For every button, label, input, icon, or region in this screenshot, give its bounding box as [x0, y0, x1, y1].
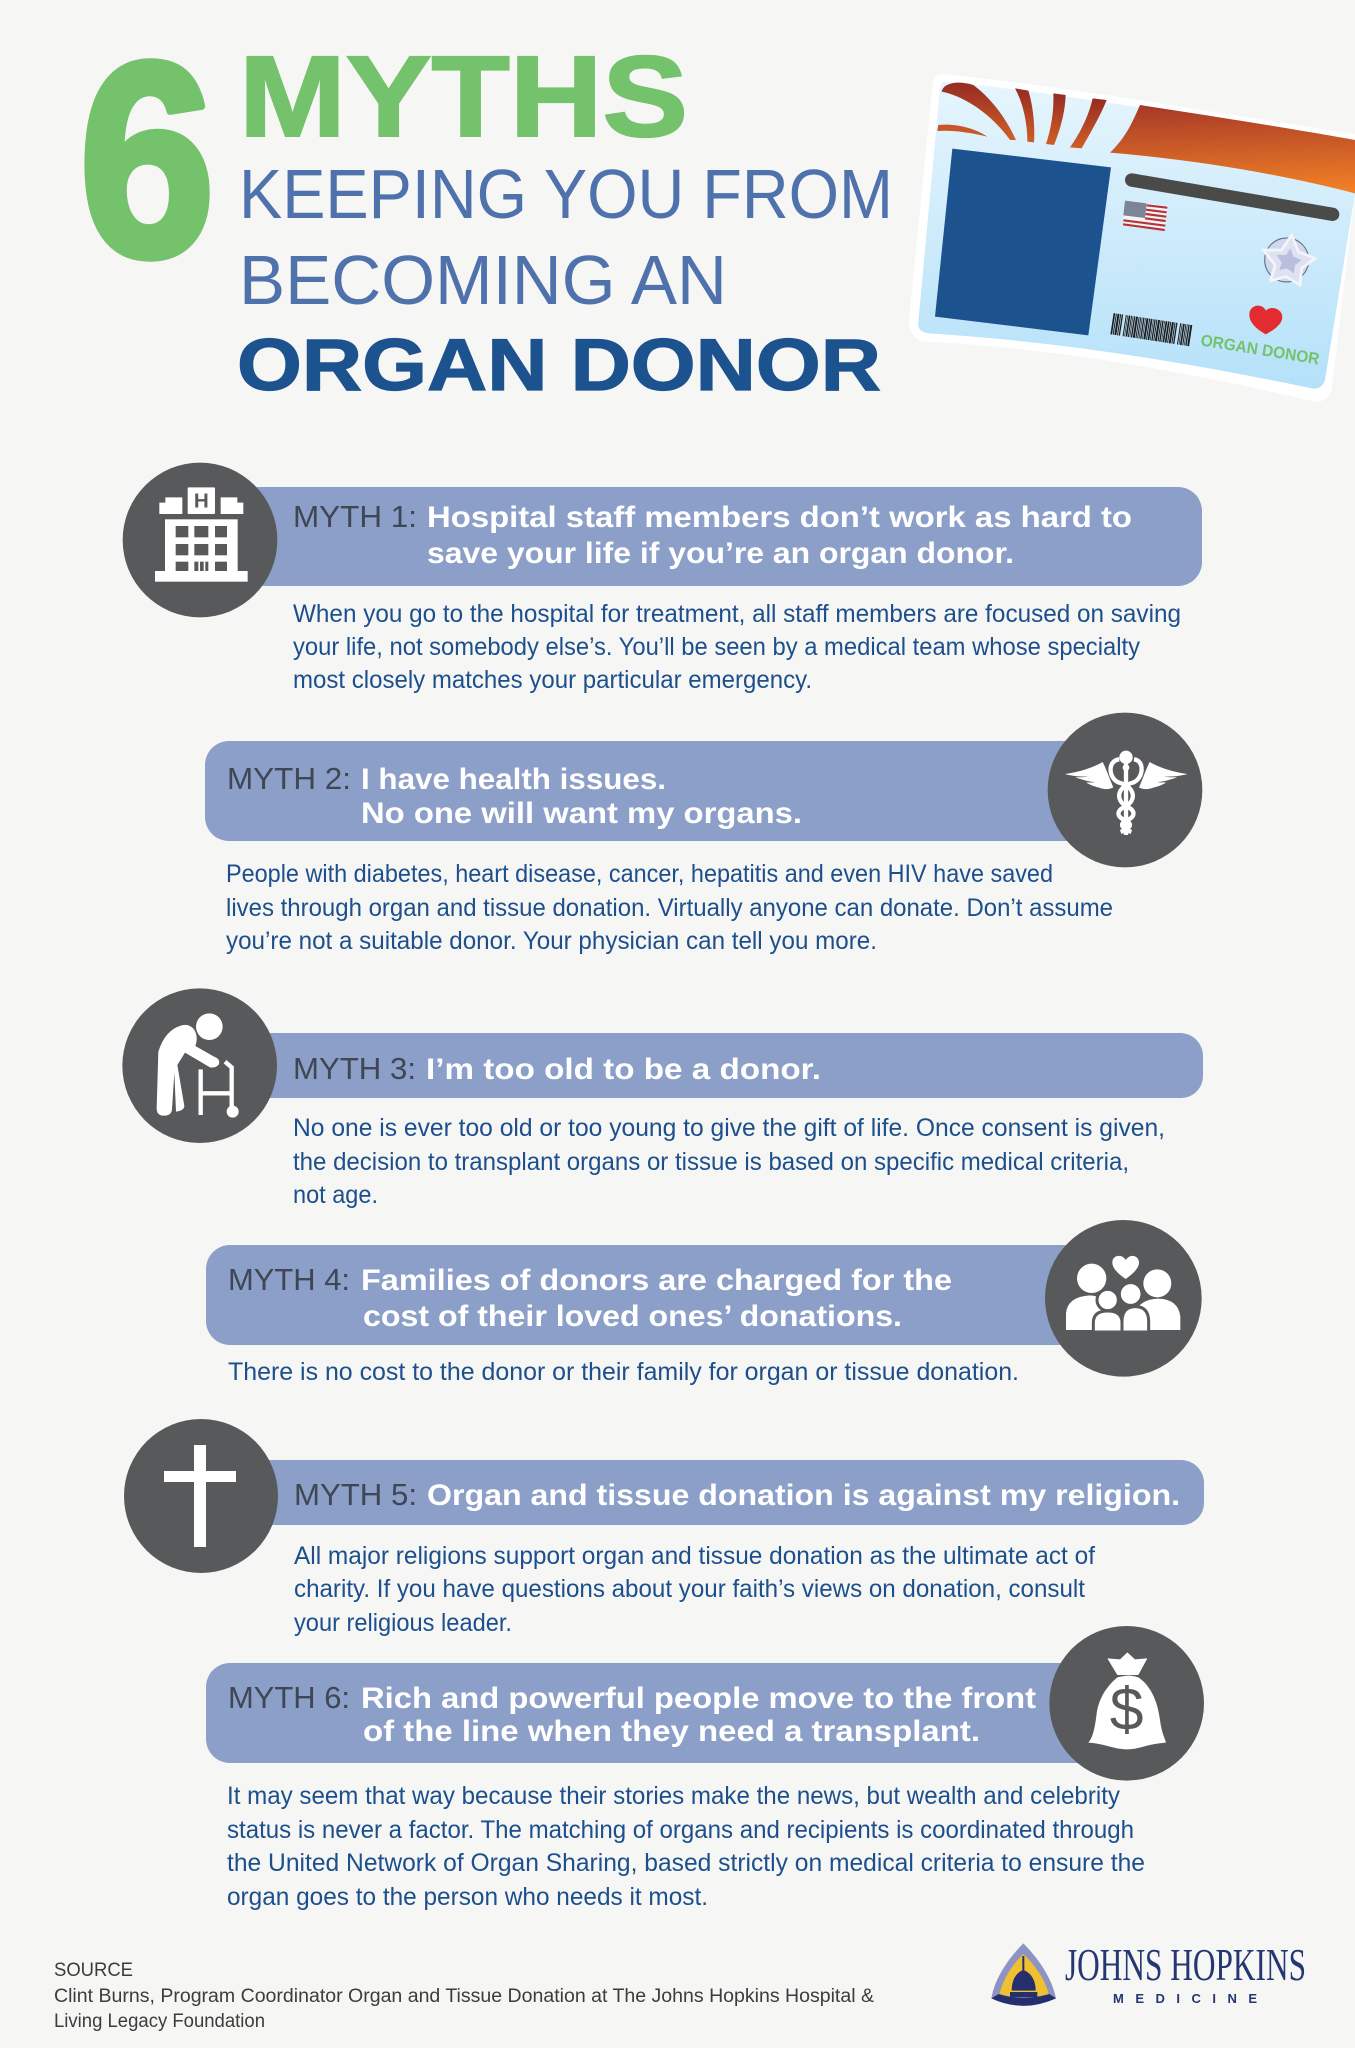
myth 1 label: MYTH 1:: [293, 499, 417, 534]
icon: caduceus: [1048, 713, 1202, 867]
panel: myth 3: [122, 988, 1203, 1209]
panel: myth 6: [206, 1626, 1204, 1911]
source note: [54, 1960, 874, 2032]
panel: myth 2: No one will want my organs.: [361, 797, 802, 830]
myth 2 explanation: lives through organ and tissue donation. Virtually anyone can donate. Don’t assume: [226, 894, 1113, 922]
source note: SOURCE: [54, 1960, 133, 1981]
myth 3 statement: I’m too old to be a donor.: [426, 1053, 821, 1086]
illustration: organ donor card: ORGAN DONOR: [1199, 332, 1321, 368]
myth 5 explanation: [294, 1542, 1095, 1637]
myth 1 banner: [200, 487, 1202, 586]
myth 1 explanation: most closely matches your particular emergency.: [293, 666, 812, 694]
myth 6 explanation: status is never a factor. The matching of organs and recipients is coordinated through: [227, 1816, 1134, 1844]
myth 3 explanation: No one is ever too old or too young to give the gift of life. Once consent is given,: [293, 1114, 1165, 1142]
logo: Johns Hopkins Medicine: [991, 1939, 1306, 2006]
myth 4 label: MYTH 4:: [228, 1262, 350, 1297]
illustration: organ donor card: [909, 74, 1355, 402]
icon: money bag: $: [1110, 1674, 1144, 1742]
panel: myth 6: of the line when they need a transplant.: [363, 1715, 980, 1748]
logo: Johns Hopkins Medicine: MEDICINE: [1113, 1991, 1257, 2006]
heading: MYTHS: MYTHS: [239, 33, 688, 161]
myth 4 statement: Families of donors are charged for the: [361, 1264, 952, 1297]
myth 2 explanation: [226, 860, 1113, 955]
myth 2 banner: [205, 741, 1125, 841]
myth 3 explanation: the decision to transplant organs or tissue is based on specific medical criteria,: [293, 1148, 1129, 1176]
myth 2 explanation: you’re not a suitable donor. Your physician can tell you more.: [226, 927, 877, 955]
myth 6 banner: [206, 1663, 1127, 1763]
myth 6 label: MYTH 6:: [228, 1680, 350, 1715]
myth 3 label: MYTH 3:: [293, 1051, 416, 1086]
myth 5 explanation: All major religions support organ and tissue donation as the ultimate act of: [294, 1542, 1095, 1570]
icon: money bag: [1049, 1626, 1204, 1781]
heading: becoming an: BECOMING AN: [239, 241, 727, 319]
myth 5 statement: Organ and tissue donation is against my religion.: [427, 1479, 1180, 1512]
myth 6 explanation: It may seem that way because their stories make the news, but wealth and celebrity: [227, 1782, 1120, 1810]
panel: myth 2: [205, 713, 1202, 955]
myth 4 explanation: There is no cost to the donor or their family for organ or tissue donation.: [228, 1358, 1019, 1386]
myth 2 label: MYTH 2:: [227, 761, 351, 796]
myth 1 explanation: When you go to the hospital for treatment, all staff members are focused on saving: [293, 600, 1181, 628]
icon: family with heart: [1045, 1220, 1202, 1377]
myth 3 explanation: [293, 1114, 1165, 1209]
myth 4 banner: [206, 1245, 1123, 1345]
myth 1 explanation: your life, not somebody else’s. You’ll be seen by a medical team whose specialty: [293, 633, 1140, 661]
myth 6 explanation: [227, 1782, 1145, 1911]
icon: cross: [124, 1419, 278, 1573]
panel: myth 4: cost of their loved ones’ donations.: [363, 1300, 902, 1333]
source note: Living Legacy Foundation: [54, 2011, 265, 2032]
myth 2 explanation: People with diabetes, heart disease, cancer, hepatitis and even HIV have saved: [226, 860, 1053, 888]
big number 6: 6: [79, 6, 215, 314]
myth 3 banner: [200, 1033, 1203, 1098]
heading: organ donor: ORGAN DONOR: [237, 325, 881, 406]
panel: myth 1: [123, 463, 1202, 694]
myth 3 explanation: not age.: [293, 1181, 378, 1209]
icon: elderly person with walker: [122, 988, 277, 1143]
myth 6 statement: Rich and powerful people move to the front: [361, 1682, 1036, 1715]
icon: hospital: H: [194, 489, 209, 512]
heading: keeping you from: KEEPING YOU FROM: [239, 155, 893, 233]
myth 1 statement: Hospital staff members don’t work as hard to: [427, 501, 1132, 534]
title: [79, 6, 893, 406]
myth 5 explanation: charity. If you have questions about your faith’s views on donation, consult: [294, 1575, 1085, 1603]
myth 2 statement: I have health issues.: [361, 763, 666, 796]
source note: Clint Burns, Program Coordinator Organ and Tissue Donation at The Johns Hopkins Hospital &: [54, 1986, 874, 2007]
panel: myth 1: save your life if you’re an organ donor.: [427, 537, 1014, 570]
myth 5 explanation: your religious leader.: [294, 1609, 512, 1637]
icon: hospital: [123, 463, 277, 617]
panel: myth 4: [206, 1220, 1202, 1386]
myth 1 explanation: [293, 600, 1181, 694]
logo shield: [991, 1943, 1056, 2006]
panel: myth 5: [124, 1419, 1204, 1637]
myth 6 explanation: the United Network of Organ Sharing, based strictly on medical criteria to ensure the: [227, 1849, 1145, 1877]
myth 5 label: MYTH 5:: [294, 1477, 417, 1512]
myth 6 explanation: organ goes to the person who needs it most.: [227, 1883, 708, 1911]
myth 5 banner: [200, 1460, 1204, 1525]
